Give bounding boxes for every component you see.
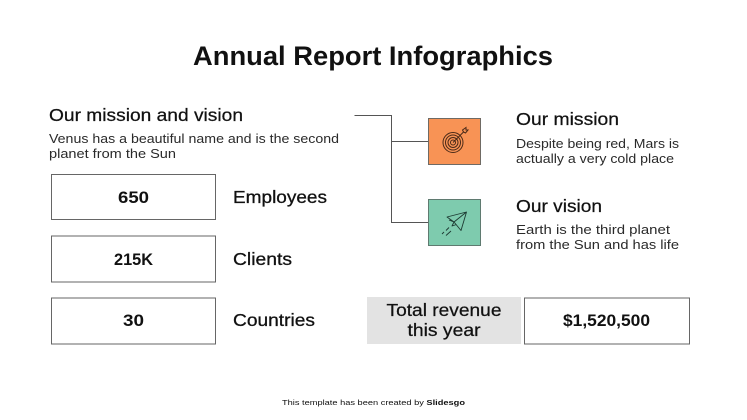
stat: clients: Clients xyxy=(233,249,292,269)
text block: intro description: planet from the Sun xyxy=(49,146,176,161)
icon: target on orange square xyxy=(428,118,480,164)
callout: total revenue label xyxy=(367,297,521,344)
text block: intro description: Venus has a beautiful name and is the second xyxy=(49,131,339,146)
text block: our vision xyxy=(516,196,679,252)
callout: total revenue value: $1,520,500 xyxy=(563,312,650,330)
callout: total revenue label: this year xyxy=(408,320,481,340)
text block: our vision: Earth is the third planet xyxy=(516,222,670,237)
stat: countries: Countries xyxy=(233,310,315,330)
footer credit: This template has been created by Slidesgo xyxy=(282,398,466,407)
stat: clients xyxy=(52,236,292,282)
stat: clients: 215K xyxy=(114,251,153,269)
title: Annual Report Infographics xyxy=(193,41,553,71)
callout: total revenue label: Total revenue xyxy=(386,300,502,320)
text block: our vision: Our vision xyxy=(516,196,602,216)
callout: total revenue value xyxy=(524,298,690,344)
panel: mission and vision intro xyxy=(49,105,339,161)
icon: paper plane on green square xyxy=(428,200,480,246)
stat: employees xyxy=(52,174,327,220)
text block: our mission: Our mission xyxy=(516,109,619,129)
text block: our mission xyxy=(516,109,680,166)
text block: our mission: Despite being red, Mars is xyxy=(516,136,680,151)
text block: our mission: actually a very cold place xyxy=(516,151,674,166)
stat: countries: 30 xyxy=(123,312,144,330)
stat: employees: 650 xyxy=(118,189,149,207)
connector lines xyxy=(354,116,429,222)
stat: employees: Employees xyxy=(233,187,327,207)
text block: intro description xyxy=(49,131,339,161)
heading: our mission and vision: Our mission and vision xyxy=(49,105,243,125)
text block: our vision: from the Sun and has life xyxy=(516,237,679,252)
stat: countries xyxy=(52,298,315,344)
